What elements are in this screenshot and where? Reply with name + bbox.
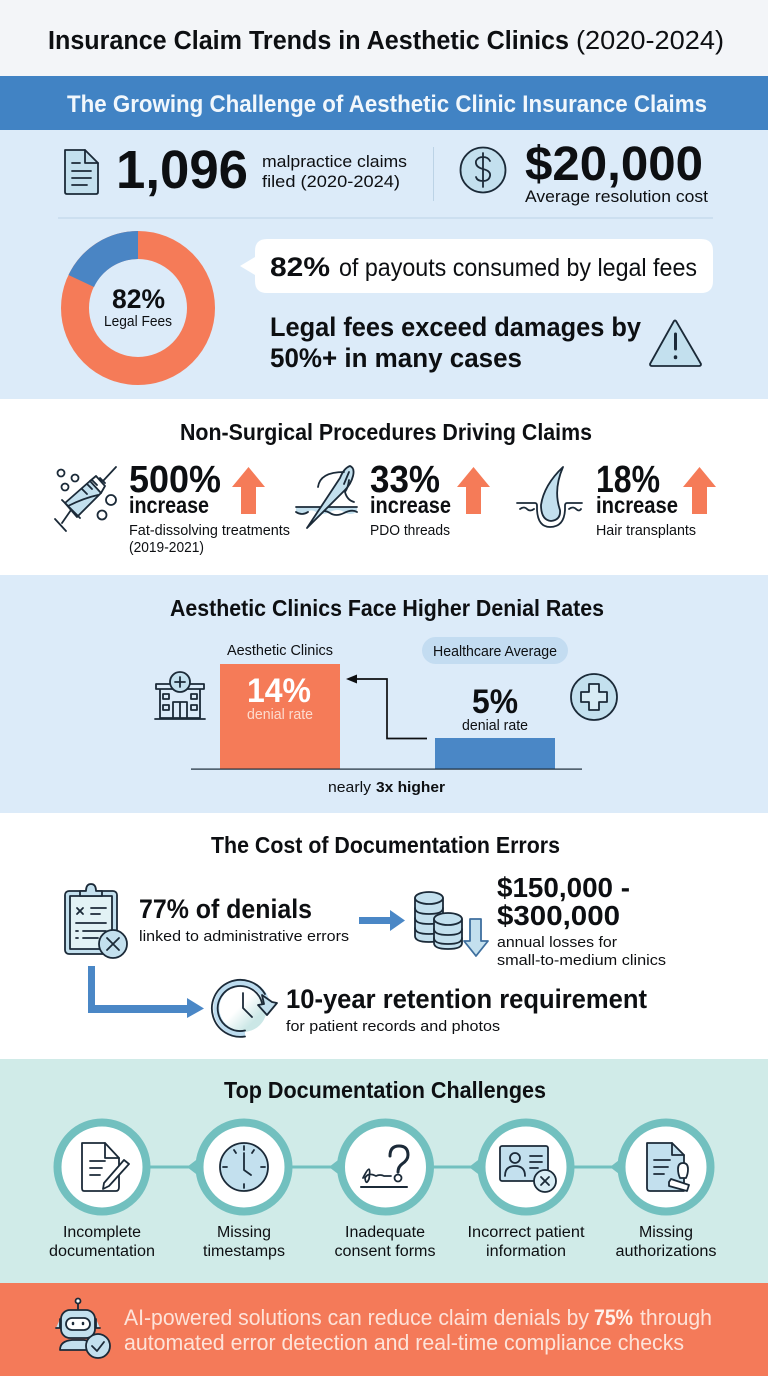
stat: 77% of denials: 77% of denials bbox=[139, 894, 312, 924]
footer message bbox=[124, 1305, 712, 1355]
heading: Non-Surgical Procedures Driving Claims bbox=[180, 419, 592, 445]
stat: hair transplants: 18% bbox=[596, 459, 660, 501]
arrow up bbox=[457, 467, 490, 514]
claims stat: filed (2020-2024) bbox=[262, 172, 400, 191]
icon: syringe bbox=[55, 467, 116, 531]
stat: 77% of denials bbox=[139, 894, 349, 945]
stat: PDO threads: PDO threads bbox=[370, 522, 450, 539]
icon: document bbox=[65, 150, 98, 194]
label: aesthetic clinics: Aesthetic Clinics bbox=[227, 643, 333, 659]
panel: denial rates bbox=[0, 575, 768, 813]
footer message: 75% bbox=[594, 1305, 633, 1330]
item: missing authorizations bbox=[616, 1122, 717, 1260]
panel: non-surgical procedures bbox=[0, 399, 768, 575]
stat: PDO threads: increase bbox=[370, 492, 451, 518]
icon: dollar coin bbox=[460, 148, 506, 192]
callout: payouts: 82% bbox=[270, 252, 330, 282]
bar: healthcare average 5% bbox=[435, 683, 555, 769]
resolution cost stat: Average resolution cost bbox=[525, 187, 708, 206]
legal fees statement bbox=[270, 312, 641, 373]
heading: Top Documentation Challenges bbox=[224, 1077, 546, 1103]
item: incomplete documentation: documentation bbox=[49, 1243, 155, 1260]
stat: annual losses: annual losses for bbox=[497, 934, 617, 951]
item: incorrect patient information: Incorrect patient bbox=[468, 1224, 585, 1241]
arrow: right bbox=[359, 910, 405, 931]
panel: claims overview bbox=[0, 130, 768, 399]
stat: PDO threads: 33% bbox=[370, 459, 440, 501]
title bbox=[0, 0, 768, 76]
item: incomplete documentation: Incomplete bbox=[63, 1224, 141, 1241]
stat: 77% of denials: linked to administrative errors bbox=[139, 928, 349, 945]
icon: hair follicle bbox=[517, 467, 582, 527]
arrow up bbox=[683, 467, 716, 514]
stat: annual losses bbox=[497, 872, 666, 969]
stat: annual losses: $150,000 - bbox=[497, 872, 630, 903]
item: incorrect patient information bbox=[468, 1122, 585, 1260]
bar: healthcare average 5%: denial rate bbox=[462, 718, 528, 734]
item: incorrect patient information: information bbox=[486, 1243, 566, 1260]
stat: retention requirement bbox=[286, 984, 647, 1035]
legal fees statement: 50%+ in many cases bbox=[270, 343, 522, 373]
arrow: elbow to retention bbox=[88, 966, 204, 1018]
item: incomplete documentation bbox=[49, 1122, 155, 1260]
connector line bbox=[102, 1157, 666, 1177]
icon: coins with down arrow bbox=[415, 892, 488, 956]
donut chart: 82% legal fees: Legal Fees bbox=[104, 314, 172, 330]
resolution cost stat: $20,000 bbox=[525, 138, 703, 191]
legal fees statement: Legal fees exceed damages by bbox=[270, 312, 641, 342]
item: missing timestamps: Missing bbox=[217, 1224, 271, 1241]
bar: healthcare average 5%: 5% bbox=[472, 683, 518, 721]
section banner: The Growing Challenge of Aesthetic Clinic Insurance Claims bbox=[67, 91, 707, 118]
bar: aesthetic clinics 14%: 14% bbox=[247, 672, 311, 710]
claims stat bbox=[116, 140, 407, 200]
arrow: comparison bbox=[346, 674, 427, 738]
bar: aesthetic clinics 14% bbox=[220, 664, 340, 769]
icon: clipboard with x bbox=[65, 884, 127, 958]
heading: Aesthetic Clinics Face Higher Denial Rates bbox=[170, 595, 604, 621]
panel: documentation errors bbox=[0, 813, 768, 1059]
comparison note bbox=[328, 779, 445, 796]
label pill: healthcare average: Healthcare Average bbox=[433, 644, 557, 660]
footer banner bbox=[0, 1283, 768, 1376]
footer message: through bbox=[640, 1305, 712, 1330]
comparison note: nearly bbox=[328, 779, 372, 796]
comparison note: 3x higher bbox=[376, 779, 445, 796]
callout: payouts bbox=[240, 239, 713, 293]
icon: warning triangle bbox=[650, 320, 701, 366]
item: missing timestamps: timestamps bbox=[203, 1243, 285, 1260]
claims stat: malpractice claims bbox=[262, 152, 407, 171]
panel: documentation challenges bbox=[0, 1059, 768, 1283]
donut chart: 82% legal fees bbox=[68, 231, 201, 371]
stat: fat-dissolving bbox=[129, 459, 290, 556]
footer message: automated error detection and real-time compliance checks bbox=[124, 1330, 684, 1355]
donut chart: 82% legal fees: 82% bbox=[112, 284, 165, 314]
stat: fat-dissolving: Fat-dissolving treatments bbox=[129, 522, 290, 539]
stat: retention requirement: 10-year retention requirement bbox=[286, 984, 647, 1014]
stat: fat-dissolving: increase bbox=[129, 492, 209, 518]
stat: fat-dissolving: 500% bbox=[129, 459, 221, 501]
item: inadequate consent forms: consent forms bbox=[334, 1243, 436, 1260]
title: (2020-2024) bbox=[576, 27, 724, 55]
item: inadequate consent forms: Inadequate bbox=[345, 1224, 425, 1241]
stat: retention requirement: for patient records and photos bbox=[286, 1018, 500, 1035]
bar: aesthetic clinics 14%: denial rate bbox=[247, 707, 313, 723]
item: missing timestamps bbox=[200, 1122, 288, 1260]
stat: hair transplants bbox=[596, 459, 696, 539]
item: missing authorizations: Missing bbox=[639, 1224, 693, 1241]
stat: annual losses: small-to-medium clinics bbox=[497, 952, 666, 969]
stat: fat-dissolving: (2019-2021) bbox=[129, 539, 204, 556]
item: inadequate consent forms bbox=[334, 1122, 436, 1260]
title: Insurance Claim Trends in Aesthetic Clinics bbox=[48, 27, 569, 55]
icon: medical cross bbox=[571, 674, 617, 720]
claims stat: 1,096 bbox=[116, 140, 248, 200]
stat: hair transplants: increase bbox=[596, 492, 678, 518]
icon: needle and thread bbox=[296, 466, 357, 528]
callout: payouts: of payouts consumed by legal fees bbox=[339, 254, 697, 282]
arrow up bbox=[232, 467, 265, 514]
heading: The Cost of Documentation Errors bbox=[211, 832, 560, 858]
stat: hair transplants: Hair transplants bbox=[596, 522, 696, 539]
icon: robot with check bbox=[56, 1298, 110, 1358]
section banner bbox=[0, 76, 768, 130]
stat: annual losses: $300,000 bbox=[497, 900, 620, 931]
icon: clock with arrow bbox=[212, 980, 277, 1037]
label pill: healthcare average bbox=[422, 637, 568, 664]
stat: PDO threads bbox=[370, 459, 451, 539]
item: missing authorizations: authorizations bbox=[616, 1243, 717, 1260]
footer message: AI-powered solutions can reduce claim denials by bbox=[124, 1305, 589, 1330]
icon: hospital bbox=[155, 672, 205, 719]
